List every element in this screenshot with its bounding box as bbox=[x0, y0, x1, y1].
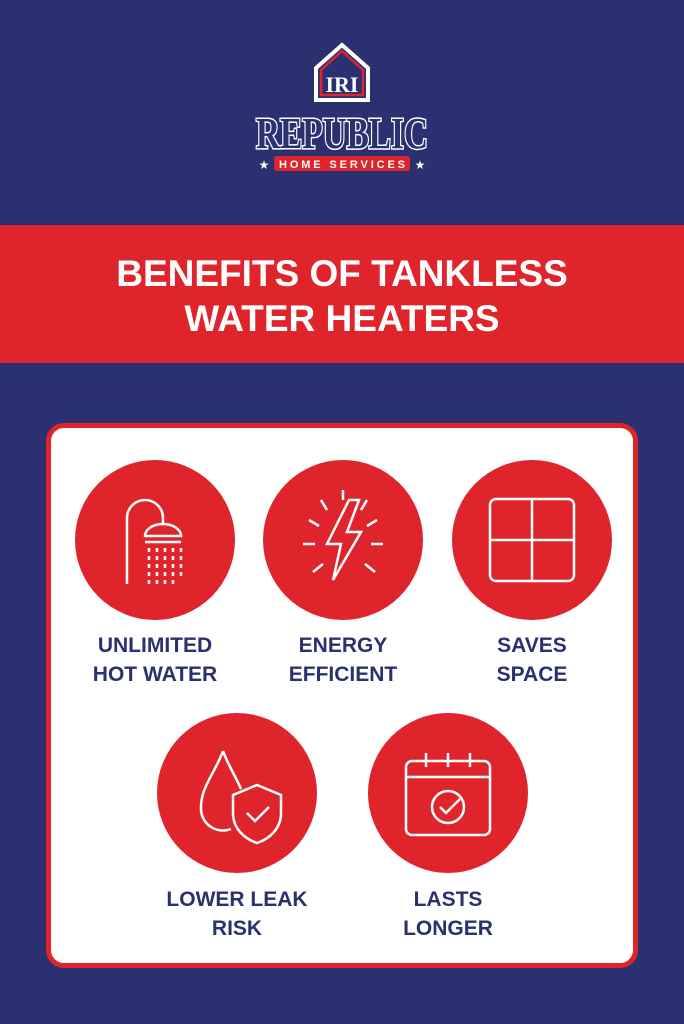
icon: house bbox=[316, 45, 368, 100]
icon: house: IRI bbox=[325, 72, 359, 97]
label: lasts longer: LASTS bbox=[414, 888, 482, 911]
label: lower leak risk: LOWER LEAK bbox=[166, 888, 308, 911]
icon: energy bbox=[263, 460, 423, 620]
label: lower leak risk bbox=[166, 888, 308, 940]
logo tagline: ★ bbox=[259, 158, 269, 172]
label: saves space bbox=[497, 634, 567, 686]
logo tagline: ★ bbox=[415, 158, 425, 172]
icon: leak bbox=[157, 713, 317, 873]
panel: benefits bbox=[46, 423, 638, 968]
logo tagline bbox=[259, 156, 425, 172]
label: unlimited hot water: UNLIMITED bbox=[98, 634, 212, 657]
title band bbox=[0, 225, 684, 363]
label: lower leak risk: RISK bbox=[212, 917, 262, 940]
icon: shower bbox=[75, 460, 235, 620]
label: energy efficient: EFFICIENT bbox=[289, 663, 397, 686]
label: energy efficient bbox=[289, 634, 397, 686]
label: unlimited hot water: HOT WATER bbox=[93, 663, 217, 686]
label: energy efficient: ENERGY bbox=[299, 634, 387, 657]
logo bbox=[255, 42, 428, 172]
icon: space bbox=[452, 460, 612, 620]
label: saves space: SPACE bbox=[497, 663, 567, 686]
label: unlimited hot water bbox=[93, 634, 217, 686]
title band: BENEFITS OF TANKLESS bbox=[116, 253, 568, 294]
icon: calendar bbox=[368, 713, 528, 873]
logo tagline: HOME SERVICES bbox=[279, 159, 405, 171]
label: lasts longer: LONGER bbox=[403, 917, 493, 940]
title band: WATER HEATERS bbox=[184, 298, 500, 339]
label: lasts longer bbox=[403, 888, 493, 940]
label: saves space: SAVES bbox=[497, 634, 567, 657]
